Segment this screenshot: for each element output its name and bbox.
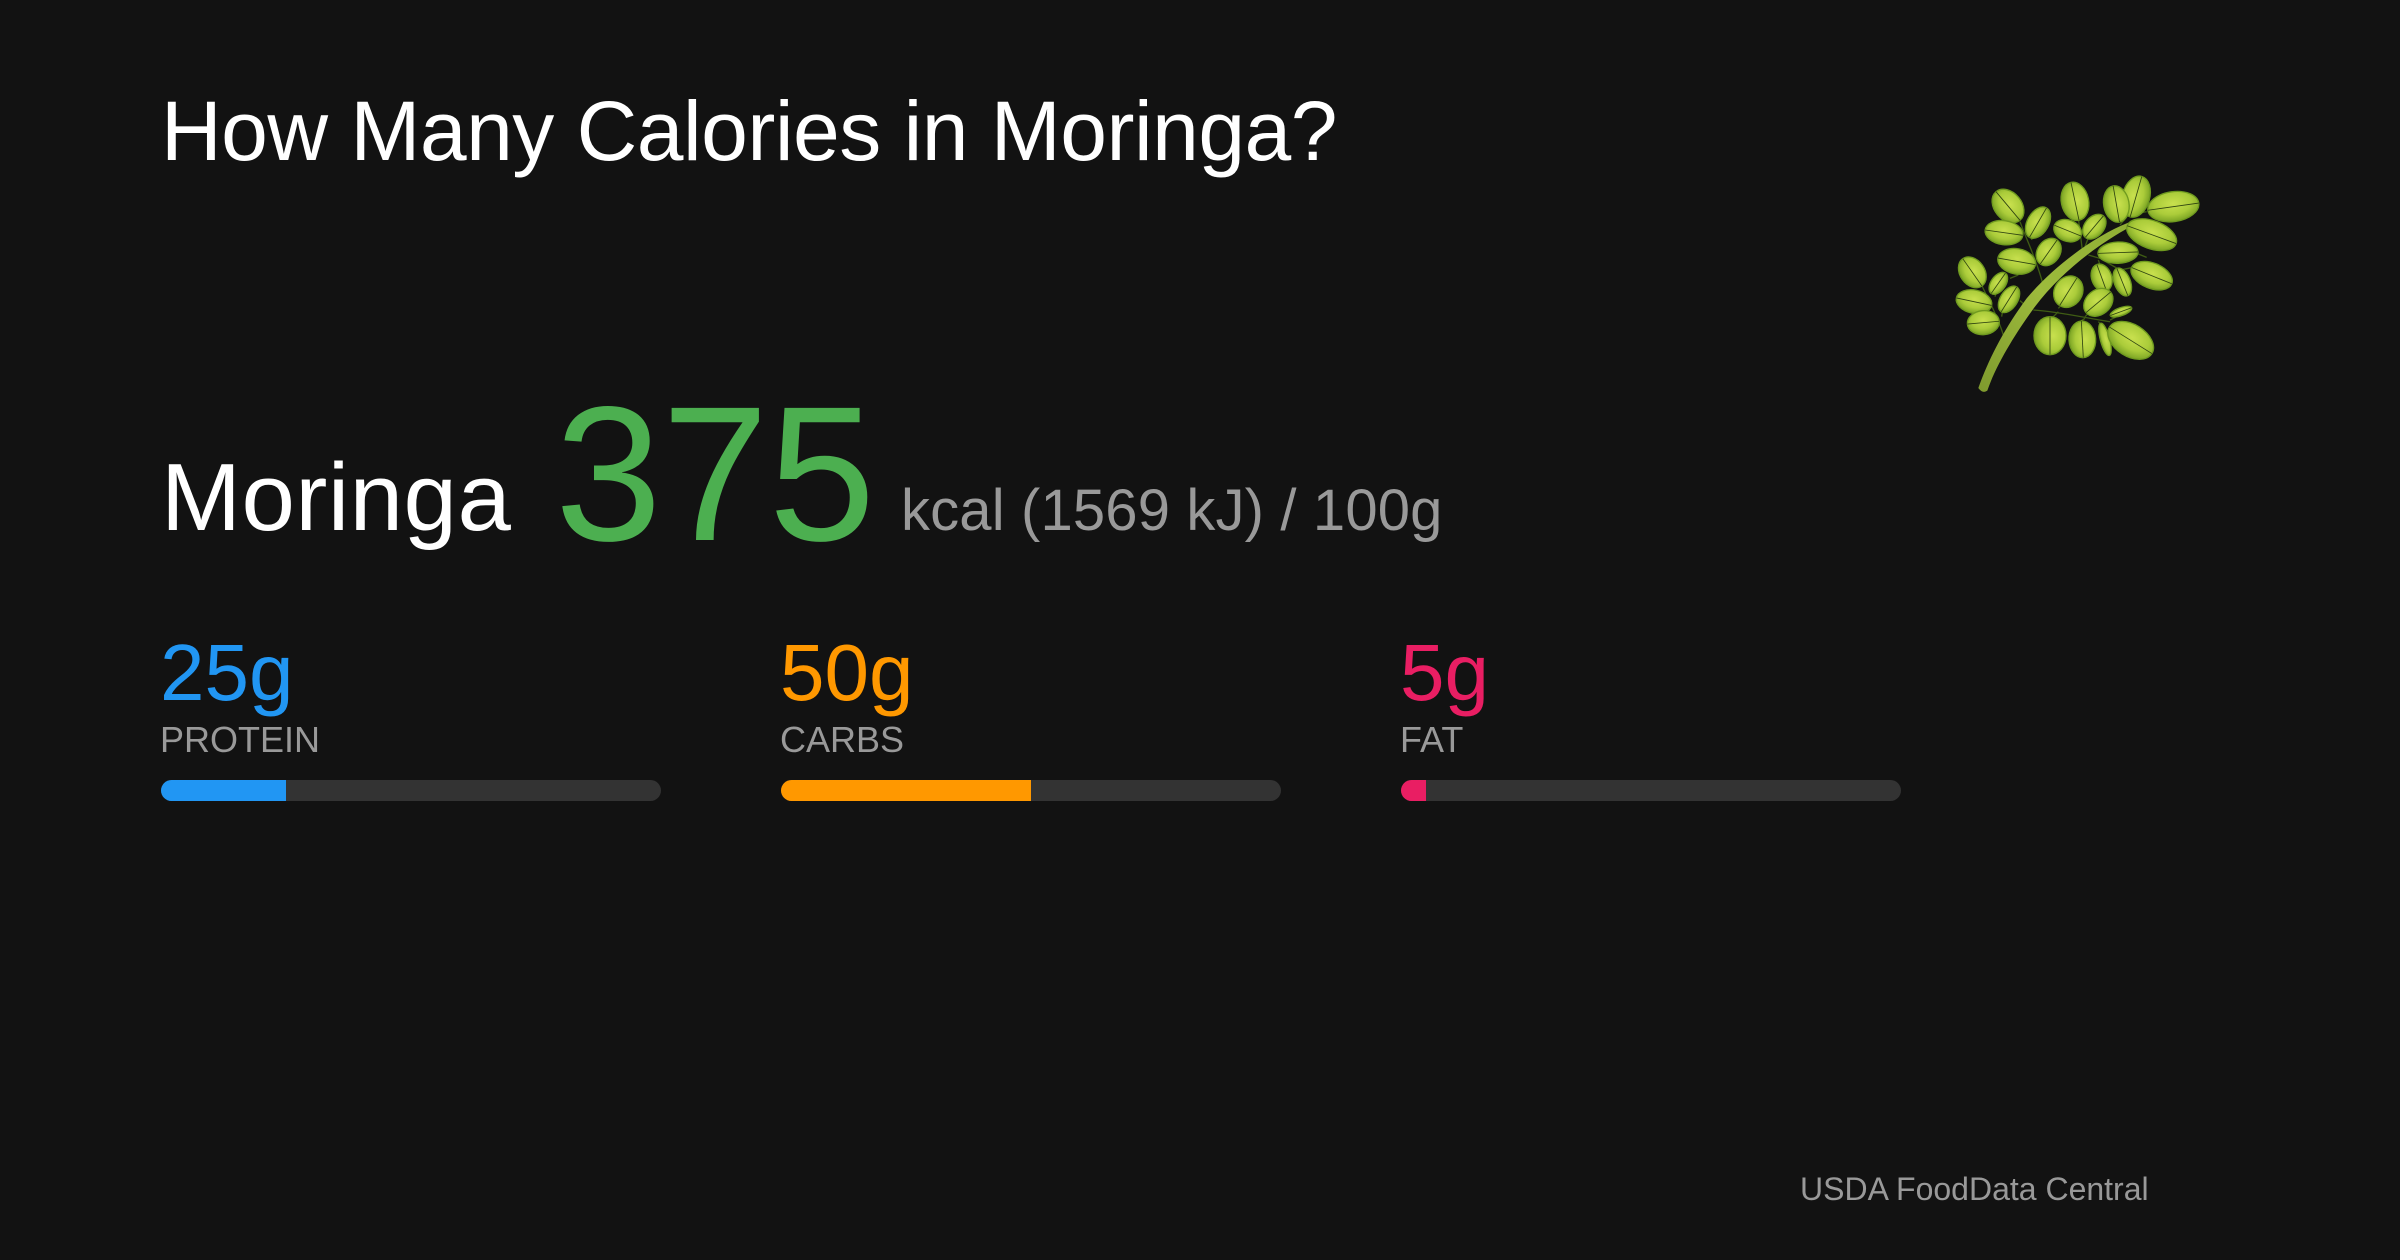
title: How Many Calories in Moringa? xyxy=(161,84,1337,178)
protein bar xyxy=(161,780,661,801)
calorie unit: kcal (1569 kJ) / 100g xyxy=(901,478,1443,543)
icon: moringa branch xyxy=(1953,173,2201,392)
fat amount: 5g xyxy=(1400,628,1489,717)
fat label: FAT xyxy=(1400,719,1463,760)
carbs label: CARBS xyxy=(780,719,904,760)
leaflets xyxy=(1953,173,2201,367)
macro: fat xyxy=(1401,645,1901,801)
main stem xyxy=(1978,223,2131,392)
macro: protein xyxy=(160,628,661,801)
carbs bar xyxy=(781,780,1281,801)
source: USDA FoodData Central xyxy=(1800,1171,2149,1207)
macro: carbs xyxy=(780,628,1281,801)
fat bar xyxy=(1401,780,1901,801)
protein label: PROTEIN xyxy=(160,719,320,760)
thin leaf stems xyxy=(1982,212,2147,335)
food name: Moringa xyxy=(161,444,511,551)
carbs amount: 50g xyxy=(780,628,913,717)
protein amount: 25g xyxy=(160,628,293,717)
calorie value: 375 xyxy=(555,366,875,581)
